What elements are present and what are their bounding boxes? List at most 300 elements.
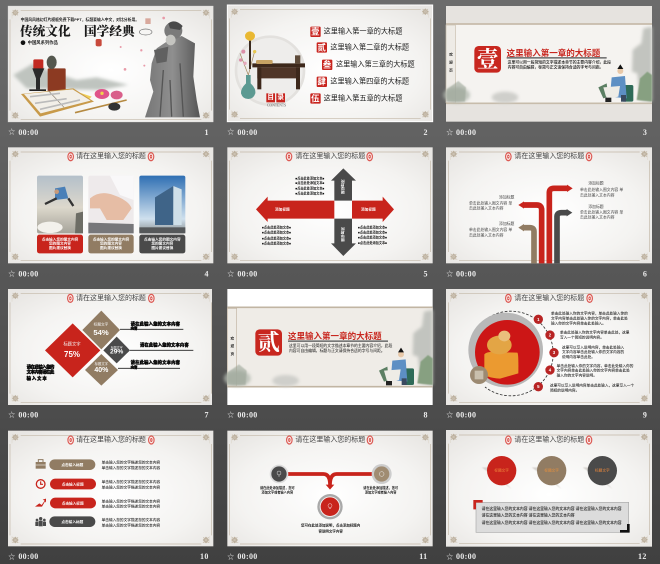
chapter central paper (446, 24, 652, 104)
side band: 迎 (449, 60, 453, 65)
bullets top: ■点击此处添加文本■ (295, 180, 324, 185)
arrow down: 添加标题 (340, 227, 345, 242)
slide 5 background (227, 147, 433, 263)
footer slide 7 (8, 410, 209, 419)
note left: 请在此输入您的 (27, 363, 55, 370)
seal photo circle (468, 313, 543, 387)
pill 1 (49, 459, 95, 470)
landscape and scholar (224, 310, 433, 386)
numbered dot 5 (534, 382, 543, 391)
slide 2: contents (227, 5, 433, 137)
text upper left: 添加标题 (499, 194, 514, 199)
text upper right (580, 180, 623, 197)
footer slide 8: ☆ (227, 411, 234, 419)
footer slide 3: ☆ (446, 128, 453, 136)
list text 5: 简短的说明内容。 (550, 388, 579, 393)
ink mountains (13, 63, 128, 90)
chapter description (289, 343, 393, 353)
numbered dot 4: 4 (549, 367, 552, 372)
list text 4: 文字内容单击此处输入你的文字内容单击此处 (557, 368, 630, 373)
note 1: 内容 (131, 326, 138, 331)
caption red: 图片建议替换 (49, 245, 71, 250)
slide 11 heading: 请在这里输入您的标题 (295, 434, 365, 443)
row text 3 (102, 498, 161, 509)
list text 1: 文字内容单击此处输入你的文字内容，单击此处 (551, 316, 628, 321)
note 3: 请在此输入您的文本内容 (131, 359, 181, 366)
box text: 请在这里输入您的文本内容 请在这里输入您的文本内容 (482, 513, 575, 518)
text upper left (469, 194, 514, 210)
chapter 3: 这里输入第三章的大标题 (336, 60, 415, 69)
arrow right (352, 197, 394, 222)
note left (27, 363, 55, 382)
dashed arc (485, 311, 553, 396)
tan sticker (537, 456, 566, 485)
slide 5: four arrows (227, 147, 433, 278)
slide 4 frame (10, 151, 211, 261)
chapter description (508, 60, 611, 70)
chapter description: 这里可以用一段简短的文字描述本章节的主要内容介绍，此段 (508, 60, 611, 65)
footer slide 6: ☆ (446, 270, 453, 278)
icon: clock (36, 480, 45, 488)
contents frame (229, 8, 431, 118)
slide 7: diamond percentages (8, 289, 212, 419)
caption tan: 点击输入您的图文内容 (93, 236, 130, 241)
numbered dot 2: 2 (549, 332, 552, 337)
footer slide 9: 00:00 (456, 410, 476, 419)
list text 3: 这里可以写入说明内容，单击此处输入 (562, 344, 624, 349)
caption centre: 您可在此处添加说明，点击添加标题内 (301, 523, 361, 528)
red arrow left (518, 201, 542, 263)
tan rules (227, 307, 433, 387)
dark diamond 29%: 标题文字 (111, 345, 123, 350)
sticker shadows (482, 467, 613, 489)
slide 6 background (446, 147, 652, 263)
landscape and scholar (443, 27, 652, 103)
series label: 中国风系列作品 (28, 39, 59, 46)
footer slide 11: 00:00 (237, 552, 258, 561)
text upper right: 击此处输入文本内容 (580, 192, 615, 197)
list text 2: 写入一个简短的说明内容。 (560, 334, 604, 339)
vase with flowers (239, 50, 256, 99)
box text (482, 506, 622, 525)
text lower right (580, 204, 623, 220)
series label (21, 39, 59, 46)
caption red: 点击输入您的图文内容 (42, 236, 79, 241)
cover background (8, 6, 213, 122)
caption centre (301, 523, 361, 534)
footer slide 6: 6 (643, 269, 647, 278)
footer slide 10: 10 (200, 552, 209, 561)
arrow down (331, 219, 356, 256)
side band (227, 308, 237, 386)
footer slide 11: 11 (419, 552, 427, 561)
dark arrow (557, 209, 572, 263)
bullets lower left: ■点击此处添加文本■ (262, 241, 291, 246)
pill 3 (50, 498, 96, 508)
list text 4 (557, 363, 634, 378)
footer slide 12: ☆ (446, 553, 453, 561)
chapter description: 内容可自由编辑，标题与正文请保持合适的字号与间距。 (508, 65, 603, 70)
slide 7 background (8, 289, 212, 405)
row text 3: 单击输入您的文字描述您的文本内容 (102, 504, 161, 509)
seals and cloud (96, 18, 152, 46)
footer slide 5: 00:00 (237, 269, 258, 278)
red diamond 75% (45, 323, 100, 377)
photo: office tower (139, 176, 185, 233)
arrow right: 添加标题 (361, 206, 376, 211)
slide 3: chapter one (443, 6, 652, 137)
slide 10 heading: 请在这里输入您的标题 (76, 434, 146, 443)
slide 8: chapter two (224, 289, 433, 419)
slide 11: merging flow (227, 431, 433, 561)
slide 11 background (227, 431, 433, 546)
tan arrow (518, 224, 534, 263)
slide 6 frame (448, 151, 650, 261)
caption centre: 容说明文字内容 (318, 529, 343, 534)
list text 5: 这里可以写入说明内容单击此处输入，这里写入一个 (550, 383, 634, 388)
footer slide 2: 00:00 (237, 128, 258, 137)
footer slide 5 (227, 269, 428, 278)
caption right (363, 485, 398, 495)
side band: 欢 (449, 51, 453, 56)
chapter 4: 这里输入第四章的大标题 (330, 77, 409, 86)
row text 1: 单击输入您的文字描述您的文本内容 (102, 465, 161, 470)
pill 3: 点击输入标题 (62, 500, 84, 505)
black corner bracket (620, 524, 628, 531)
side band: 欢 (231, 335, 235, 340)
slide 4: three photos (8, 147, 213, 278)
bullets lower right (358, 224, 387, 245)
side band (446, 25, 455, 103)
footer slide 1: ☆ (8, 128, 15, 136)
slide 9 heading: 请在这里输入您的标题 (514, 293, 584, 302)
slide 12 heading (505, 434, 592, 445)
text upper left: 单击此处输入图文内容 单 (469, 200, 512, 205)
slide 4 heading (67, 151, 154, 161)
bullets lower left: ■点击此处添加文本■ (262, 225, 291, 230)
caption left (260, 485, 295, 495)
slide 12 heading: 请在这里输入您的标题 (514, 434, 584, 443)
caption right: 请在此处添加描述，您可 (363, 485, 398, 490)
list text 2: 单击此处输入你的文字内容单击此处，这里 (560, 329, 630, 334)
box text: 请在这里输入您的文本内容 请在这里输入您的文本内容 请在这里输入您的文本内容 (482, 520, 622, 525)
side band: 页 (449, 69, 453, 73)
list text 4: 单击此处输入你的文字内容，单击此处输入你的 (557, 363, 634, 368)
caption right: 添加文字或者输入内容 (365, 490, 397, 495)
contents background (227, 5, 433, 122)
row text 1: 单击输入您的文字描述您的文本内容 (102, 460, 161, 465)
caption left: 添加文字或者输入内容 (262, 490, 294, 495)
slide 12 frame (448, 434, 650, 544)
slide 12: three stickers (446, 430, 652, 561)
row text 2: 单击输入您的文字描述您的文本内容 (102, 484, 161, 489)
bullets lower right: ■点击此处添加文本■ (358, 235, 387, 240)
bullets lower left: ■点击此处添加文本■ (262, 236, 291, 241)
footer slide 7: ☆ (8, 411, 15, 419)
chapter 3 (322, 60, 415, 70)
subtitle line: 中国风风格幻灯片模板免费下载PPT，标题要输入中文，对比分析用。 (21, 17, 139, 22)
slide 10 frame (10, 434, 211, 544)
icon: people (35, 517, 46, 526)
chapter 1: 这里输入第一章的大标题 (324, 27, 402, 36)
text lower left (469, 221, 514, 237)
numbered dot 5: 5 (537, 384, 540, 389)
chapter 5: 这里输入第五章的大标题 (324, 93, 402, 102)
chapter 2 background (227, 289, 433, 405)
red node (317, 494, 343, 519)
slide 9 heading (505, 293, 593, 303)
footer slide 12: 00:00 (456, 552, 476, 561)
red diamond 75%: 标题文字 (63, 340, 81, 347)
list text 1 (551, 311, 628, 326)
footer slide 2: 2 (424, 128, 428, 137)
bullets lower right: ■点击此处添加文本■ (358, 224, 387, 229)
numbered dot 3 (549, 348, 559, 357)
list text 5 (550, 383, 634, 393)
slide 5 heading (286, 151, 373, 161)
caption left: 请在此处添加描述，您可 (260, 485, 295, 490)
list text 1: 输入你的文字内容单击此处输入。 (551, 321, 606, 326)
caption tan: 图片建议替换 (100, 245, 122, 250)
dark diamond 29%: 29% (110, 348, 123, 355)
text upper right: 添加标题 (588, 180, 604, 185)
bullets top: ■点击此处添加文本■ (295, 175, 324, 180)
footer slide 12 (446, 552, 647, 561)
footer slide 12: 12 (638, 552, 647, 561)
lamp (245, 31, 255, 69)
footer slide 9: ☆ (446, 411, 453, 419)
bullets top: ■点击此处添加文本■ (295, 191, 324, 196)
pill 1: 点击输入标题 (61, 462, 84, 467)
text lower right: 添加标题 (588, 204, 604, 209)
chapter description: 内容可自由编辑，标题与正文请保持合适的字号与间距。 (289, 348, 385, 353)
note left: 文本内容请在此 (27, 368, 55, 375)
row text 3: 单击输入您的文字描述您的文本内容 (102, 498, 161, 503)
side band: 页 (231, 352, 235, 356)
footer slide 3: 3 (643, 128, 647, 137)
bullets lower left: ■点击此处添加文本■ (262, 230, 291, 235)
row text 4 (102, 517, 161, 527)
list text 3 (562, 344, 624, 359)
candle stand (29, 59, 46, 91)
arrow up: 添加标题 (340, 179, 345, 194)
slide 10 heading (67, 434, 155, 445)
icon: rising chart (35, 499, 46, 507)
confucius statue (145, 21, 200, 117)
chapter 4: 肆 (317, 77, 326, 87)
chapter 5 (310, 93, 402, 104)
text lower left: 单击此处输入图文内容 单 (469, 227, 512, 232)
slide 6: branching arrows (446, 147, 652, 278)
arrow left (256, 197, 334, 222)
box text: 请在这里输入您的文本内容 请在这里输入您的文本内容 请在这里输入您的文本内容 (482, 506, 622, 511)
slide 11 frame (229, 434, 431, 544)
tan badge (470, 366, 488, 384)
slide 1: cover (8, 6, 213, 137)
text upper right: 单击此处输入图文内容 单 (580, 187, 623, 192)
list text 4: 输入你的文字内容说明。 (557, 373, 597, 378)
tan diamond 54% (82, 311, 120, 349)
footer slide 3 (446, 128, 647, 137)
bullets lower right: ■点击此处添加文本■ (358, 240, 387, 245)
tan diamond 40%: 40% (94, 367, 109, 374)
red corner bracket (475, 501, 483, 509)
slide 7 frame (10, 292, 211, 402)
caption dark: 点击输入您的图文内容 (144, 236, 181, 241)
text lower left: 击此处输入文本内容 (469, 232, 504, 237)
contents seal: 目 (267, 93, 274, 101)
chapter description: 这里可以用一段简短的文字描述本章节的主要内容介绍，此段 (289, 343, 393, 348)
red sticker: 标题文字 (494, 468, 509, 473)
footer slide 8 (227, 410, 428, 419)
numbered dot 1 (534, 315, 543, 324)
caption red: 您的图文内容 (49, 241, 71, 246)
bullets top (295, 175, 324, 196)
bullets lower left (262, 225, 291, 246)
row text 2 (102, 479, 161, 489)
slide 7 heading (67, 293, 155, 303)
footer slide 10: 00:00 (18, 552, 39, 561)
footer slide 4 (8, 269, 209, 278)
text box (476, 502, 629, 532)
brush pot and figurine (47, 56, 66, 92)
note 1: 请在此输入您的文本内容 (131, 320, 181, 327)
dark sticker: 标题文字 (595, 468, 610, 473)
tan diamond 40%: 标题文字 (95, 361, 109, 366)
text lower right: 击此处输入文本内容 (580, 215, 615, 220)
red arrow right (549, 185, 573, 263)
text lower right: 单击此处输入图文内容 单 (580, 210, 623, 215)
row text 4: 单击输入您的文字描述您的文本内容 (102, 522, 161, 527)
red sticker (487, 456, 516, 485)
side band: 迎 (231, 343, 235, 348)
numbered dot 4 (545, 365, 555, 375)
list text 2 (560, 329, 630, 339)
caption tan (88, 235, 134, 253)
caption dark: 您的图文内容 (151, 241, 174, 246)
note 2: 请在此输入您的文本内容 (140, 341, 189, 348)
chapter 2: 贰 (317, 42, 326, 52)
pill 2: 点击输入标题 (62, 481, 84, 486)
footer slide 4: 00:00 (18, 269, 39, 278)
dark sticker (588, 456, 617, 485)
footer slide 4: ☆ (8, 270, 15, 278)
chapter 2: 这里输入第二章的大标题 (330, 42, 409, 51)
footer slide 8: 00:00 (237, 410, 258, 419)
footer slide 7: 7 (205, 410, 209, 419)
chapter heading: 这里输入第一章的大标题 (288, 331, 382, 341)
slide 10: four labelled pills (8, 431, 213, 561)
numbered dot 3: 3 (553, 350, 556, 355)
chapter 1: 壹 (311, 27, 320, 37)
footer slide 5: ☆ (227, 270, 234, 278)
red numeral tile: 壹 (477, 47, 499, 72)
dark diamond 29% (103, 337, 130, 363)
slide 12 background (446, 430, 652, 547)
photo: leaping man (37, 176, 83, 233)
footer slide 6 (446, 269, 647, 278)
list text 3: 说明内容单击此处。 (562, 354, 595, 359)
slide 6 heading (505, 151, 592, 161)
contents seal: CONTENTS (267, 103, 286, 107)
photo: hand on tablet (88, 176, 134, 233)
slide 6 heading: 请在这里输入您的标题 (514, 151, 584, 160)
footer slide 10 (8, 552, 209, 561)
bullets lower right: ■点击此处添加文本■ (358, 230, 387, 235)
slide 4 heading: 请在这里输入您的标题 (76, 151, 146, 160)
footer slide 10: ☆ (8, 553, 15, 561)
note 3: 内容 (131, 364, 138, 369)
slide 9 background (446, 289, 652, 405)
slide 5 frame (229, 151, 431, 261)
slide 9: seal with numbered list (446, 289, 652, 419)
footer slide 7: 00:00 (18, 410, 39, 419)
footer slide 9: 9 (643, 410, 647, 419)
petals (120, 17, 165, 71)
dark node (270, 465, 288, 483)
footer slide 1: 00:00 (18, 128, 39, 137)
chapter 2 central paper (227, 307, 433, 387)
icon: briefcase (36, 460, 46, 469)
writing desk (252, 55, 305, 89)
footer slide 5: 5 (424, 269, 428, 278)
footer slide 11: ☆ (227, 553, 234, 561)
slide 11 heading (286, 434, 373, 445)
tan diamond 54%: 54% (93, 328, 109, 337)
ink wash circle (236, 37, 304, 105)
footer slide 2 (227, 128, 428, 137)
footer slide 8: 8 (424, 410, 428, 419)
numbered dot 1: 1 (537, 317, 540, 322)
pill 4: 点击输入标题 (61, 519, 84, 524)
slide 9 frame (448, 292, 650, 402)
caption red (37, 235, 83, 253)
row text 4: 单击输入您的文字描述您的文本内容 (102, 517, 161, 522)
row text 2: 单击输入您的文字描述您的文本内容 (102, 479, 161, 484)
tan node (372, 464, 392, 484)
tan diamond 54%: 标题文字 (94, 321, 109, 326)
slide 5 heading: 请在这里输入您的标题 (295, 151, 365, 160)
footer slide 4: 4 (205, 269, 209, 278)
caption dark (139, 235, 185, 253)
open book (21, 88, 94, 117)
brush and inkstone (75, 100, 127, 113)
arrow up (331, 168, 356, 201)
arrow left: 添加标题 (275, 206, 290, 211)
red numeral tile: 贰 (258, 330, 280, 355)
text upper left: 击此处输入文本内容 (469, 205, 504, 210)
caption dark: 图片建议替换 (151, 245, 174, 250)
slide 10 background (8, 431, 213, 546)
lotus flowers (95, 89, 123, 99)
footer slide 9 (446, 410, 647, 419)
footer slide 1 (8, 128, 209, 137)
numbered dot 2 (545, 330, 555, 340)
chapter 5: 伍 (311, 93, 320, 103)
note 3 (131, 359, 181, 369)
footer slide 2: ☆ (227, 128, 234, 136)
note 1 (131, 320, 181, 331)
slide 4 background (8, 147, 213, 263)
footer slide 11 (227, 552, 427, 561)
bullets top: ■点击此处添加文本■ (295, 185, 324, 190)
chapter background (446, 6, 652, 122)
contents seal: 录 (277, 93, 284, 101)
text lower left: 添加标题 (499, 221, 514, 226)
chapter heading: 这里输入第一章的大标题 (507, 48, 601, 58)
tan sticker: 标题文字 (544, 468, 559, 473)
slide 7 heading: 请在这里输入您的标题 (76, 293, 146, 302)
